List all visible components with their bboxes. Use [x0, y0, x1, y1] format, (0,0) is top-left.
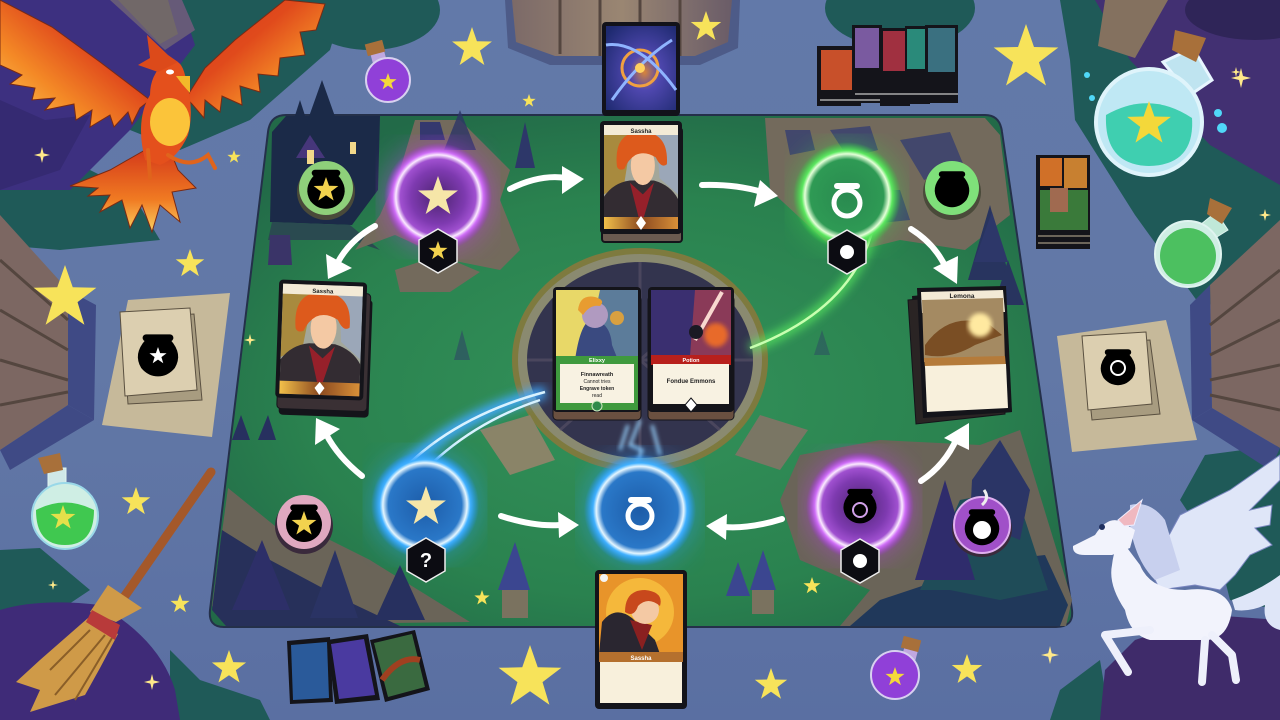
center card: spell: Elixxy	[589, 358, 606, 364]
hero card: top: Sassha	[630, 129, 652, 135]
tail	[70, 150, 196, 232]
hex token: bottom right	[841, 539, 879, 583]
arrow 6	[501, 512, 579, 538]
node: green cauldron	[793, 142, 901, 250]
wooden tower top center	[505, 0, 740, 65]
card deck: right	[1036, 155, 1090, 249]
right wing	[186, 0, 325, 118]
paper stack: right	[1057, 320, 1197, 452]
game board	[210, 80, 1072, 627]
mane	[1130, 504, 1180, 580]
energy streak: blue	[385, 392, 545, 505]
potion: green flask	[1155, 198, 1232, 287]
hex token: bottom left	[407, 538, 445, 582]
broom	[16, 472, 211, 712]
hex token: top left	[419, 229, 457, 273]
potion: large cyan flask	[1084, 30, 1227, 175]
stars	[34, 11, 1058, 705]
ability card: right stack	[908, 286, 1012, 424]
center card: spell: Engrave token	[580, 386, 614, 392]
tail	[1232, 575, 1280, 630]
arrows: flow between stages	[315, 166, 969, 540]
wooden tower top left	[110, 0, 195, 50]
legs	[1105, 630, 1236, 682]
lightning	[620, 420, 660, 478]
hex token: bottom left: ?	[420, 550, 432, 572]
ability card: right stack: Lemona	[950, 293, 975, 300]
left wing	[0, 0, 150, 127]
phoenix	[0, 0, 325, 232]
terrain: top left castles	[268, 80, 520, 292]
arrow 2	[702, 180, 778, 207]
wooden wall left	[0, 215, 96, 470]
potion: top purple flask	[365, 40, 410, 102]
node: blue cauldron	[584, 454, 696, 566]
center card: spell: Finnawreath	[581, 372, 614, 378]
wooden tower top right	[1098, 0, 1168, 58]
paper stack: left	[102, 293, 230, 437]
center card: spell: Cannot tries	[584, 379, 611, 385]
node: blue star	[371, 451, 479, 559]
terrain: bottom right village	[726, 430, 1072, 626]
board spires	[454, 122, 1008, 360]
cauldron token: green star	[297, 161, 355, 220]
card back: top	[602, 22, 680, 116]
cauldron token: pink star	[275, 495, 333, 554]
hero card: bottom	[595, 570, 687, 709]
arrow 8	[326, 226, 375, 279]
center card: potion	[648, 287, 734, 420]
arrow 7	[315, 418, 362, 476]
center card: potion: Fondue Emmons	[667, 379, 716, 385]
card deck: top right	[817, 25, 958, 106]
node: purple star	[384, 143, 492, 251]
energy streak: green	[750, 232, 872, 348]
center card: spell: read	[592, 393, 602, 399]
hero card: top	[600, 121, 682, 242]
arrow 3	[911, 229, 958, 284]
node: purple cauldron	[806, 452, 914, 560]
head	[1073, 520, 1135, 555]
cauldron token: green	[923, 161, 981, 220]
hex token: top right	[828, 230, 866, 274]
wing	[1150, 455, 1280, 590]
potion: bottom purple flask	[871, 636, 921, 699]
terrain: top right rocks	[765, 118, 1024, 305]
cauldron token: purple	[952, 490, 1012, 557]
card deck: bottom left	[287, 630, 430, 704]
teal shadows	[0, 170, 160, 250]
body	[141, 60, 191, 165]
hero card: bottom: Sassha	[630, 656, 652, 662]
central circle	[480, 248, 808, 475]
potion: left green flask	[32, 453, 98, 549]
terrain: bottom left village	[212, 415, 530, 626]
center card: potion: Potion	[682, 358, 700, 364]
arrow 1	[510, 166, 584, 194]
hero card: left stack: Sassha	[312, 289, 334, 295]
wooden wall right	[1190, 220, 1280, 470]
arrow 4	[921, 423, 969, 481]
body	[1111, 544, 1232, 640]
bottom corners	[0, 548, 90, 620]
hero card: left stack	[275, 280, 373, 418]
pegasus	[1073, 455, 1280, 682]
claw	[148, 150, 215, 178]
center card: spell	[553, 287, 641, 420]
arrow 5	[706, 514, 782, 540]
